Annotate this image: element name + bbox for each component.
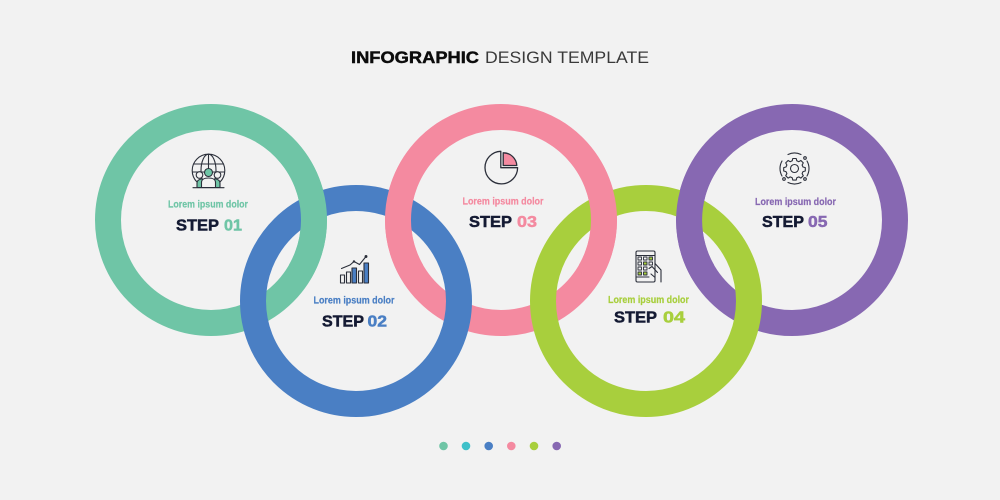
step heading <box>322 314 387 330</box>
step heading: 03 <box>517 214 537 231</box>
interlocking rings <box>108 117 895 404</box>
icon: gear with orbit <box>780 153 809 184</box>
label: Lorem ipsum dolor <box>462 196 544 208</box>
step heading: STEP <box>762 214 804 231</box>
step heading: STEP <box>469 214 512 231</box>
title <box>351 48 649 67</box>
step 02 block <box>314 256 395 330</box>
title: INFOGRAPHIC <box>351 48 479 67</box>
label: Lorem ipsum dolor <box>314 296 395 306</box>
step heading <box>176 218 242 234</box>
icon: globe with people <box>192 154 225 188</box>
step 05 block <box>755 153 836 231</box>
label: Lorem ipsum dolor <box>168 200 248 210</box>
step heading <box>469 214 537 231</box>
icon: hand holding phone keypad <box>636 251 661 282</box>
step heading: STEP <box>322 314 364 330</box>
step 04 block <box>608 251 689 326</box>
label: Lorem ipsum dolor <box>755 197 836 208</box>
step 01 block <box>168 154 248 234</box>
step heading: 02 <box>368 314 387 330</box>
title: DESIGN TEMPLATE <box>485 48 649 67</box>
step heading: 01 <box>224 218 242 234</box>
step heading: STEP <box>614 310 657 326</box>
step heading: STEP <box>176 218 219 234</box>
step heading <box>762 214 828 231</box>
step heading: 05 <box>808 214 828 231</box>
icon: pie chart <box>485 151 518 184</box>
step heading <box>614 310 685 326</box>
label: Lorem ipsum dolor <box>608 295 689 306</box>
step heading: 04 <box>663 310 685 326</box>
step 03 block <box>462 151 544 231</box>
pagination dots <box>439 442 561 450</box>
icon: bar chart with trend line <box>340 256 368 283</box>
